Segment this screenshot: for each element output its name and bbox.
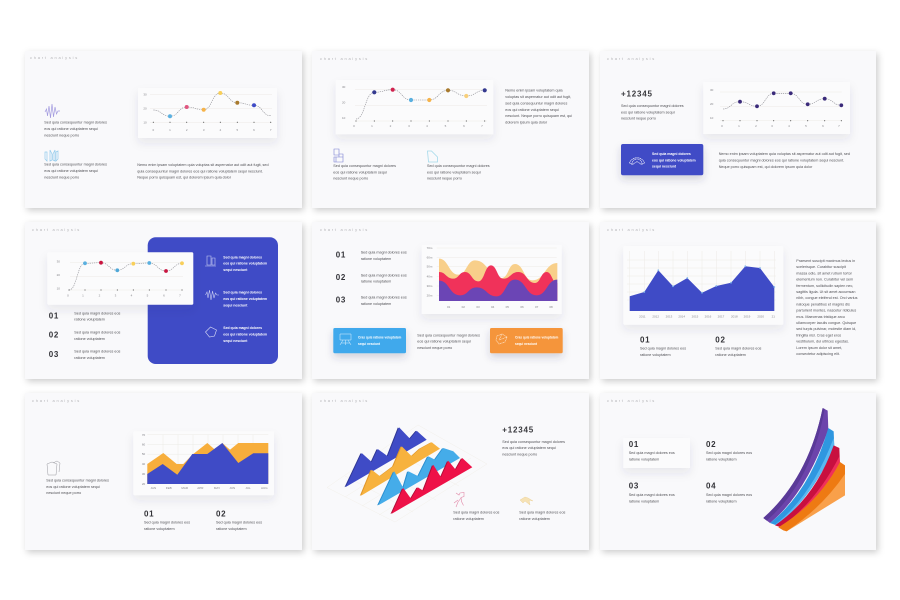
text: item three: sequi nesciunt [223,339,248,343]
item 02: ratione voluptatem [706,457,737,461]
area chart card: 20m [427,293,433,297]
line chart card: 4 [131,293,133,297]
text block: long paragraph: mus. Maecenas tristique arcu [796,315,845,319]
line chart card: 30 [57,259,60,263]
text block: signal icon description: Sed quia consequuntur magni dolores [44,163,107,167]
area chart card: 30m [427,284,433,288]
line chart card: 5 [805,124,807,128]
line chart card: 1 [371,124,373,128]
text: item two: sequi nesciunt [223,303,248,307]
item 01: 01 [640,336,650,345]
text block: long paragraph: consectetur adipiscing elit. [796,352,840,356]
panel: line chart with paragraph [312,51,589,208]
item 03: 03 [629,482,639,491]
item 02: ratione voluptatem [216,527,247,531]
text block: right description: Sed quia consequuntur magni dolores [427,164,490,168]
text block: right description: nesciunt neque porro [427,177,462,181]
list item 01: 01 [49,311,59,320]
series: yellow [360,442,440,496]
heading: chart analysis: chart analysis [32,398,81,403]
icon: network [496,334,507,344]
list item 02 [336,273,407,284]
area chart card: 60m [427,255,433,259]
text block: icon description: eos qui ratione voluptatem sequi [46,485,100,489]
text block: middle description: Sed quia consequuntur magni dolores [417,333,480,337]
icon: purple sound wave [45,104,60,118]
list item 02: 02 [49,331,59,340]
callout text: Cras quis ratione voluptatem [358,336,401,340]
stacked area chart card: 50 [142,452,145,456]
item 02: 02 [216,510,226,519]
list item 02: ratione voluptatem [74,337,105,341]
item 02: ratione voluptatem [715,353,746,357]
callout text: sequi nesciunt [652,165,677,169]
text block: middle description: nesciunt neque porro [417,346,452,350]
big number: +12345 [621,90,653,98]
stacked area chart card: MAR [181,486,189,490]
text block: right paragraph: dolorem ipsum quia dolor [505,120,548,124]
line chart card: 6 [163,293,165,297]
area chart card: 07 [535,305,539,309]
text block: wave icon description: Sed quia consequuntur magni dolores [44,120,107,124]
text block: middle description: eos qui ratione voluptatem sequi [417,340,471,344]
list item 01: ratione voluptatem [361,257,391,261]
line chart card: 20 [57,273,60,277]
panel: number with blue callout [600,51,876,208]
icon: yellow shape [520,497,533,505]
list item 01: 01 [336,251,346,260]
line chart card: 3 [408,124,410,128]
line chart card: 10 [710,116,714,120]
panel: stacked area chart [25,393,302,550]
text block: long paragraph: scelerisque. Curabitur suscipit [796,265,846,269]
text: item two: eos qui ratione voluptatem [223,297,267,301]
line chart card: 6 [463,124,465,128]
text block: left description: nesciunt neque porro [333,177,368,181]
line chart card: 1 [738,124,740,128]
callout: blue [333,328,406,353]
line chart card: 4 [426,124,428,128]
item 01 [629,440,675,461]
text block: yellow icon description: ratione voluptatem [519,517,550,521]
line chart card [138,88,277,138]
text: item one: eos qui ratione voluptatem [223,262,267,266]
line chart card: 20 [143,106,147,110]
item 04: 04 [706,482,716,491]
big number: +12345 [502,426,534,435]
heading: chart analysis: chart analysis [320,398,369,403]
callout text: eos qui ratione voluptatem [652,158,696,162]
text block: left description: eos qui ratione voluptatem sequi [333,170,387,174]
panel: wave area chart with callouts [312,222,589,379]
stacked area chart card: JUL [245,486,251,490]
card behind item 01 [623,438,690,468]
text block: long paragraph: fermentum, sollicitudin sapien nec, [796,284,853,288]
area chart card: 2016 [705,314,712,318]
line chart card: 6 [822,124,824,128]
stacked area chart card: JAN [150,486,156,490]
item 03 [629,482,675,503]
area chart card: 2015 [692,314,699,318]
item 02: 02 [715,336,726,345]
line chart card: 5 [236,128,238,132]
icon: pink figure [454,492,464,507]
line chart card: 3 [203,128,205,132]
text block: paragraph: Nemo enim ipsam voluptatem quia voluptas sit aspernatur aut odit aut fugit, sed [719,152,850,156]
callout text: Sed quia magni dolores [652,152,691,156]
area chart card: 21 [772,314,775,318]
item 04 [706,482,752,503]
heading: chart analysis: chart analysis [320,56,369,61]
heading: chart analysis: chart analysis [607,56,656,61]
panel: isometric mountain chart [312,393,589,550]
text block: long paragraph: sed turpis pulvinar, molestie diam id, [796,327,856,331]
text block: number description: nesciunt neque porro [621,117,656,121]
line chart card: 4 [219,128,221,132]
blue panel with list [148,237,278,364]
item 02 [715,336,762,357]
text block: long paragraph: elementum non. Curabitur vel sem [796,278,853,282]
heading: chart analysis: chart analysis [32,227,81,232]
stacked area chart card: JUN [229,486,235,490]
text: item three: Sed quia magni dolores [223,326,262,330]
ribbon: red [775,445,840,528]
callout text: sequi nesciunt [515,342,537,346]
text block: right paragraph: Nemo enim ipsam voluptatem quia [505,89,563,93]
text block: long paragraph: nibh, congue eleifend est. Orci varius [796,296,858,300]
icon: wave [206,290,219,300]
item 02 [706,440,752,461]
line chart card: 7 [179,293,181,297]
line chart card: 20 [342,100,346,104]
text block: long paragraph: Praesent suscipit maximus lectus in [796,259,855,263]
text block: right paragraph: voluptas sit aspernatur aut odit aut fugit, [505,95,571,99]
text: item two: Sed quia magni dolores [223,291,262,295]
text block: yellow icon description: Sed quia magni dolores eos [519,511,565,515]
item 03: Sed quia magni dolores eos [629,493,675,497]
stacked area chart card: 20 [142,482,145,486]
stacked area chart card: APR [197,486,204,490]
ribbon: orange [778,462,845,531]
stacked area chart card: AUG [261,486,268,490]
panel: line chart overlapping blue panel [25,222,302,379]
area chart card: 2011 [639,314,646,318]
item 01: ratione voluptatem [640,353,671,357]
area chart card: 2014 [678,314,685,318]
list item 02: Sed quia magni dolores eos [74,331,120,335]
callout text: sequi nesciunt [358,342,380,346]
line chart card: 3 [771,124,773,128]
area chart card: 2017 [718,314,725,318]
text block: number description: eos qui ratione voluptatem sequi [502,446,556,450]
list item 01: ratione voluptatem [74,318,105,322]
list item 03: ratione voluptatem [74,356,105,360]
area chart card: 2013 [666,314,673,318]
list item 02: 02 [336,273,346,282]
line chart card: 30 [143,92,147,96]
text block: right paragraph: sed quia consequuntur magni dolores [505,102,567,106]
wave areas [439,259,557,301]
stacked area chart card: 60 [142,442,145,446]
text block: right paragraph: eos qui ratione voluptatem sequi [505,108,559,112]
text block: number description: Sed quia consequuntur magni dolores [621,104,684,108]
text block: signal icon description: eos qui ratione voluptatem sequi [44,169,98,173]
line chart card [47,252,193,305]
heading: chart analysis: chart analysis [607,398,656,403]
text block: paragraph: quia consequuntur magni dolores eos qui ratione voluptatem sequi nesciunt. [719,158,844,162]
area chart card: 05 [506,305,509,309]
item 01: Sed quia magni dolores eos [640,347,686,351]
stacked area chart card: 70 [142,433,145,437]
series: red [390,458,472,514]
item 01: Sed quia magni dolores eos [629,451,675,455]
text block: long paragraph: fringilla nisl. Cras eget eros [796,333,841,337]
heading: chart analysis: chart analysis [607,227,656,232]
stacked area chart card: MAY [214,486,220,490]
icon: shopping bags [47,461,60,475]
text block: paragraph: Neque porro quisquam est, qui dolorem ipsum quia dolor [719,165,813,169]
area chart card: 02 [462,305,465,309]
text block: long paragraph: Lorem ipsum dolor sit amet, [796,346,842,350]
isometric chart [327,425,487,522]
area chart card: 50m [427,265,433,269]
line chart card: 30 [710,88,714,92]
text block: long paragraph: parturient montes, nascetur ridiculus [796,309,856,313]
text block: pink icon description: ratione voluptatem [453,517,484,521]
text block: icon description: Sed quia consequuntur magni dolores [46,479,109,483]
line chart card: 0 [67,293,69,297]
line chart card: 7 [481,124,483,128]
item 03: ratione voluptatem [629,499,659,503]
item 02: Sed quia magni dolores eos [216,521,262,525]
list item 01: Sed quia magni dolores eos [74,311,120,315]
callout: orange [490,328,563,353]
item 01: ratione voluptatem [144,527,175,531]
stacked area chart card [133,431,274,495]
icon: document and chart [334,149,343,162]
line chart card: 4 [788,124,790,128]
ribbon chart [763,408,845,531]
item 01 [144,510,190,531]
text block: signal icon description: nesciunt neque porro [44,176,79,180]
area chart card: 08 [549,305,553,309]
text: item three: eos qui ratione voluptatem [223,332,267,336]
line chart card: 5 [147,293,149,297]
icon: gauge [630,158,644,164]
area chart card [422,245,562,314]
text block: long paragraph: sagittis ligula. Ut sit amet accumsan [796,290,855,294]
series: blue [377,448,460,506]
list item 03: ratione voluptatem [361,302,391,306]
area chart card: 06 [520,305,524,309]
line chart card: 3 [115,293,117,297]
text block: icon description: nesciunt neque porro [46,491,81,495]
line chart card: 2 [99,293,101,297]
area chart card: 01 [447,305,451,309]
text block: wave icon description: eos qui ratione voluptatem sequi [44,127,98,131]
text block: number description: Sed quia consequuntur magni dolores [502,440,565,444]
area chart card: 2020 [757,314,764,318]
text: item one: sequi nesciunt [223,268,248,272]
list item 01 [336,251,407,261]
line chart card: 1 [82,293,84,297]
text block: right paragraph: nesciunt. Neque porro quisquam est, qui [505,114,572,118]
line chart card: 10 [342,116,346,120]
panel: curved ribbon chart [600,393,876,550]
list item 03: 03 [336,296,346,305]
line chart card: 1 [169,128,171,132]
line chart card [703,82,850,134]
text block: paragraph: Nemo enim ipsam voluptatem quia voluptas sit aspernatur aut odit aut fugit, sed [137,163,269,167]
text: item one: Sed quia magni dolores [223,255,262,259]
line chart card: 2 [390,124,392,128]
text block: paragraph: quia consequuntur magni dolores eos qui ratione voluptatem sequi nesciunt. [137,169,263,173]
list item 03: Sed quia magni dolores eos [74,350,120,354]
text block: paragraph: Neque porro quisquam est, qui dolorem ipsum quia dolor [137,176,232,180]
list item 01: Sed quia magni dolores eos [361,251,407,255]
text block: long paragraph: ullamcorper iaculis congue. Quisque [796,321,856,325]
list item 02: Sed quia magni dolores eos [361,273,407,277]
item 01: 01 [144,510,154,519]
line chart card: 2 [755,124,757,128]
series: navy [344,427,427,487]
item 02 [216,510,262,531]
text block: long paragraph: massa odio, sit amet rutrum tortor [796,271,853,275]
item 02: Sed quia magni dolores eos [706,451,752,455]
area chart card: 2019 [744,314,751,318]
item 01: Sed quia magni dolores eos [144,521,190,525]
icon: monitor [340,334,351,345]
item 04: ratione voluptatem [706,499,737,503]
line chart card: 7 [270,128,272,132]
item 01 [640,336,686,357]
line chart card: 30 [342,85,346,89]
item 01: ratione voluptatem [629,457,659,461]
line chart card: 7 [838,124,840,128]
icon: light blue signal [45,150,58,161]
text block: wave icon description: nesciunt neque porro [44,134,79,138]
panel: single area chart with long paragraph [600,222,876,379]
list item 03: 03 [49,350,59,359]
item 04: Sed quia magni dolores eos [706,493,752,497]
text block: pink icon description: Sed quia magni dolores eos [453,511,499,515]
item 02: 02 [706,440,716,449]
callout text: Cras quis ratione voluptatem [515,336,558,340]
icon: folder [428,151,438,162]
area chart card: 2012 [652,314,659,318]
heading: chart analysis: chart analysis [320,227,369,232]
ribbon: purple [763,408,828,523]
list item 03: Sed quia magni dolores eos [361,296,407,300]
area chart card: 03 [476,305,480,309]
stacked area chart card: 30 [142,472,145,476]
list item 03 [336,296,407,306]
item 02: Sed quia magni dolores eos [715,347,761,351]
text block: long paragraph: vestibulum, dui ultrices egestas. [796,340,849,344]
list item 01 [49,311,121,322]
icon: bar document [205,256,216,266]
text block: number description: nesciunt neque porro [502,452,537,456]
text block: long paragraph: natoque penatibus et magnis dis [796,302,850,306]
line chart card: 10 [143,120,147,124]
line chart card [336,80,493,134]
stacked area chart card: 40 [142,462,145,466]
list item 02 [49,331,121,341]
icon: book [206,327,216,337]
area chart card [623,246,783,325]
line chart card: 0 [721,124,723,128]
panel: line chart with two icons [25,51,302,208]
line chart card: 0 [353,124,355,128]
text block: left description: Sed quia consequuntur magni dolores [333,164,396,168]
line chart card: 6 [253,128,255,132]
area chart card: 40m [427,275,433,279]
line chart card: 10 [57,286,60,290]
stacked area chart card: FEB [166,486,172,490]
area chart card: 2018 [731,314,738,318]
area chart card: 04 [491,305,495,309]
area chart card: 70m [427,246,433,250]
line chart card: 20 [710,102,714,106]
line chart card: 2 [186,128,188,132]
text block: right description: eos qui ratione voluptatem sequi [427,170,481,174]
list item 03 [49,350,121,360]
line chart card: 0 [152,128,154,132]
heading: chart analysis: chart analysis [30,55,79,60]
text block: number description: eos qui ratione voluptatem sequi [621,110,675,114]
ribbon: blue [770,428,834,525]
callout: blue box [621,144,703,175]
item 01: 01 [629,440,639,449]
line chart card: 5 [445,124,447,128]
list item 02: ratione voluptatem [361,280,391,284]
